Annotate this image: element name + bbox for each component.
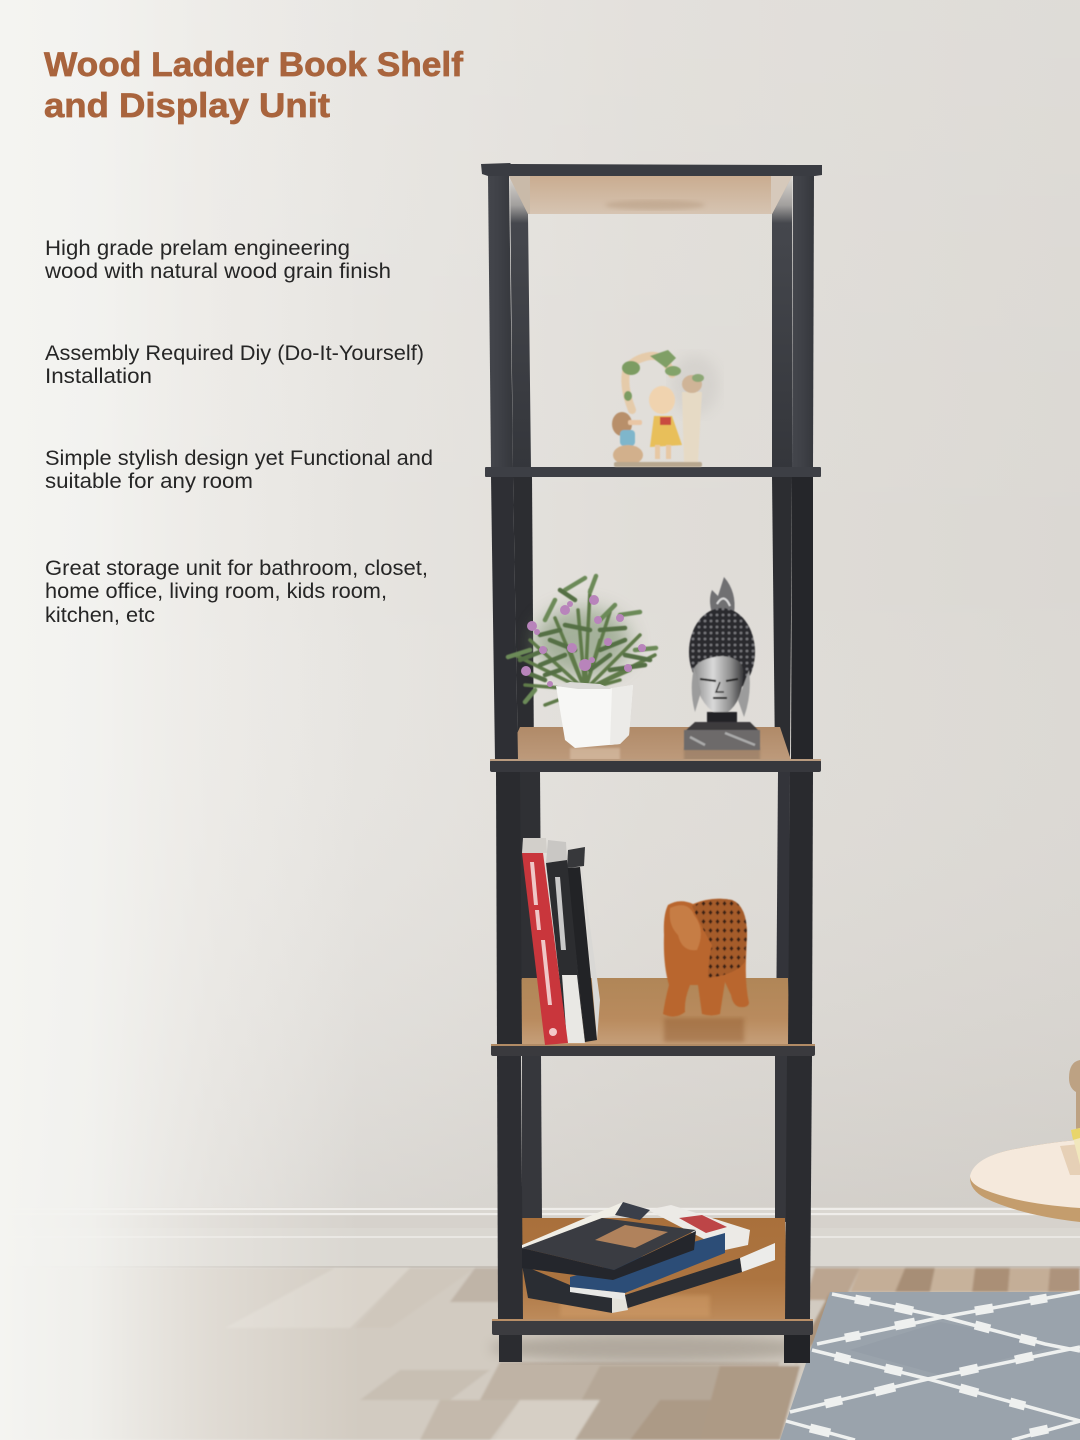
feature text: material <box>44 237 391 283</box>
shelf board 2 <box>490 759 821 772</box>
side table with vase and book <box>970 1060 1080 1222</box>
title: and Display Unit <box>44 87 330 125</box>
feature text: storage: Great storage unit for bathroom, closet, <box>45 557 428 580</box>
feature text: storage: home office, living room, kids room, <box>45 580 387 603</box>
feature text: storage <box>45 557 428 627</box>
figurine: children and arch <box>612 350 704 467</box>
figurine shadow <box>671 355 719 415</box>
back posts <box>510 176 792 1222</box>
shelf shadow on floor <box>490 1334 810 1362</box>
feature text: material: wood with natural wood grain finish <box>44 260 391 283</box>
feature text: design: Simple stylish design yet Functional and <box>45 447 433 470</box>
feature text: design: suitable for any room <box>45 470 253 493</box>
wood plank floor <box>0 1268 1080 1440</box>
top board <box>481 163 822 176</box>
carved wooden elephant <box>663 899 749 1017</box>
title <box>44 46 464 125</box>
feature text: material: High grade prelam engineering <box>45 237 350 260</box>
Buddha head statue <box>684 577 760 750</box>
feature text: storage: kitchen, etc <box>45 604 155 627</box>
feature text: assembly: Assembly Required Diy (Do-It-Yourself) <box>45 342 424 365</box>
shelf unit <box>481 163 822 1363</box>
skirting board <box>0 1207 1080 1268</box>
feature text: design <box>45 447 433 493</box>
shelf board 1 <box>485 467 821 477</box>
plant in white pot <box>508 576 656 748</box>
shelf board 3 <box>491 1044 815 1056</box>
tan underside of top board <box>508 174 793 214</box>
title: Wood Ladder Book Shelf <box>44 46 464 84</box>
left white fade <box>0 0 360 1440</box>
feature text: assembly: Installation <box>45 365 152 388</box>
feature text: assembly <box>45 342 424 388</box>
wood shelf tops <box>505 727 791 760</box>
shelf board 4 <box>492 1319 813 1335</box>
stack of magazines <box>522 1202 775 1313</box>
rug <box>780 1292 1080 1440</box>
stack of upright books <box>522 838 600 1045</box>
front posts <box>488 176 814 1363</box>
